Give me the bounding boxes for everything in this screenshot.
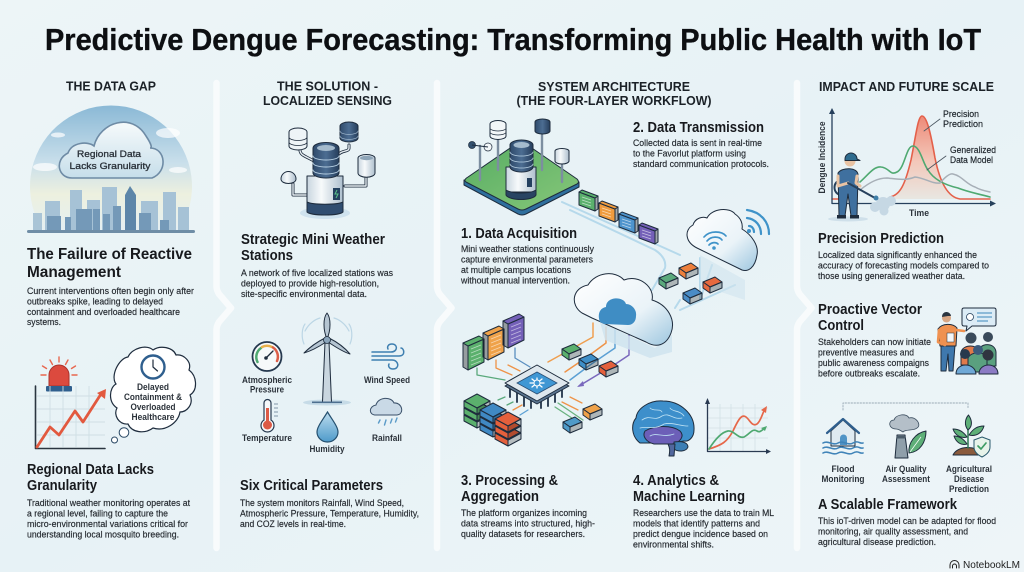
panel: the solution <box>240 78 419 529</box>
panel heading: the solution: THE SOLUTION - <box>277 78 378 94</box>
watermark: NotebookLM: NotebookLM <box>963 559 1020 571</box>
label: agricultural disease prediction <box>946 464 992 494</box>
icon: atmospheric pressure gauge <box>252 342 282 371</box>
icon: worker spraying <box>828 153 896 222</box>
text block: proactive vector control: before outbreaks escalate. <box>818 368 920 378</box>
text block: regional data lacks granularity: micro-environmental variations critical for <box>27 519 188 529</box>
text block: analytics and machine learning: Machine Learning <box>633 489 745 505</box>
text block: processing and aggregation: The platform organizes incoming <box>461 508 587 518</box>
panel heading: system architecture <box>516 79 712 108</box>
text block: failure of reactive management: systems. <box>27 317 61 327</box>
text block: processing and aggregation: quality datasets for researchers. <box>461 529 585 539</box>
text block: precision prediction <box>818 231 989 281</box>
text block: regional data lacks granularity <box>27 462 190 540</box>
text block: regional data lacks granularity: Granularity <box>27 478 97 494</box>
chart: dengue incidence over time: Data Model <box>950 155 993 165</box>
callout: delayed containment thought bubble: Overloaded <box>130 402 176 412</box>
chart: dengue incidence over time <box>817 108 996 218</box>
text block: processing and aggregation: Aggregation <box>461 489 539 505</box>
icon: presenter and audience <box>938 308 998 374</box>
panel heading: impact and future scale: IMPACT AND FUTURE SCALE <box>819 79 994 94</box>
icon: air quality factory <box>890 415 926 458</box>
label: wind speed: Wind Speed <box>364 375 410 385</box>
icon: flood monitoring <box>823 419 863 454</box>
label: flood monitoring: Flood <box>832 464 854 474</box>
label: atmospheric pressure <box>242 375 292 394</box>
illustration: city under regional cloud: Regional Data <box>77 149 142 160</box>
scale connector <box>843 403 968 410</box>
text block: data transmission: Collected data is sent in real-time <box>633 138 762 148</box>
icon: server racks <box>463 314 524 370</box>
panel heading: system architecture: (THE FOUR-LAYER WORKFLOW) <box>516 93 712 108</box>
callout: delayed containment thought bubble: Containment & <box>124 392 183 402</box>
icon: mini weather station <box>281 122 375 219</box>
text block: failure of reactive management: containment and overloaded healthcare <box>27 307 180 317</box>
icon: data packets in transit <box>579 190 658 244</box>
icon: brain <box>633 401 694 456</box>
text block: strategic mini weather stations <box>241 232 393 299</box>
icon: humidity drop <box>317 412 338 442</box>
text block: failure of reactive management: Current interventions often begin only after <box>27 286 194 296</box>
text block: proactive vector control: preventive measures and <box>818 348 914 358</box>
text block: proactive vector control: Stakeholders can now initiate <box>818 337 931 347</box>
icon: small packets <box>659 263 722 304</box>
text block: a scalable framework: agricultural disease prediction. <box>818 537 936 547</box>
text block: analytics and machine learning: models that identify patterns and <box>633 518 760 528</box>
text block: a scalable framework: A Scalable Framework <box>818 497 958 513</box>
icon: thermometer <box>261 400 278 432</box>
label: air quality assessment <box>882 464 930 484</box>
illustration: sensor platform <box>464 119 579 215</box>
text block: regional data lacks granularity: understanding local mosquito breeding. <box>27 530 179 540</box>
text block: data acquisition <box>460 226 594 286</box>
text block: precision prediction: Localized data significantly enhanced the <box>818 250 977 260</box>
callout: delayed containment thought bubble: Healthcare <box>132 412 175 422</box>
panel: the data gap <box>27 78 196 540</box>
text block: proactive vector control: public awareness compaigns <box>818 358 929 368</box>
text block: proactive vector control <box>818 302 931 378</box>
text block: six critical parameters: The system monitors Rainfall, Wind Speed, <box>240 498 404 508</box>
icon: wind <box>372 344 404 369</box>
text block: data transmission: to the Favorlut platform using <box>633 148 746 158</box>
text block: strategic mini weather stations: deployed to provide high-resolution, <box>241 278 379 288</box>
icon: rain cloud <box>370 398 402 425</box>
text block: proactive vector control: Proactive Vector <box>818 302 922 318</box>
text block: precision prediction: accuracy of forecasting models compared to <box>818 260 989 270</box>
text block: analytics and machine learning <box>633 473 774 550</box>
text block: regional data lacks granularity: Traditional weather monitoring operates at <box>27 498 190 508</box>
text block: a scalable framework: This ioT-driven model can be adapted for flood <box>818 516 996 526</box>
text block: data transmission <box>633 120 769 169</box>
panel heading: the solution <box>263 78 392 108</box>
illustration: pale data flow paths <box>562 202 735 310</box>
text block: failure of reactive management: The Failure of Reactive <box>27 246 192 263</box>
icon: alarm siren <box>41 357 77 392</box>
panel heading: system architecture: SYSTEM ARCHITECTURE <box>538 79 690 94</box>
icon: database stacks <box>464 394 521 446</box>
panel heading: the solution: LOCALIZED SENSING <box>263 93 392 108</box>
text block: data transmission: 2. Data Transmission <box>633 120 764 136</box>
text block: regional data lacks granularity: a regional level, failing to capture the <box>27 508 168 518</box>
label: temperature: Temperature <box>242 433 292 443</box>
chart: dengue incidence over time: Dengue Incidence <box>817 121 827 194</box>
panel heading: the data gap: THE DATA GAP <box>66 78 156 94</box>
label: atmospheric pressure: Atmospheric <box>242 375 292 385</box>
label: agricultural disease prediction: Disease <box>954 474 984 484</box>
icon: wind turbine <box>302 313 352 406</box>
text block: analytics and machine learning: Researchers use the data to train ML <box>633 508 774 518</box>
label: rainfall: Rainfall <box>372 433 402 443</box>
label: agricultural disease prediction: Agricultural <box>946 464 992 474</box>
text block: strategic mini weather stations: A network of five localized stations was <box>241 268 393 278</box>
text block: precision prediction: those using generalized weather data. <box>818 271 965 281</box>
text block: proactive vector control: Control <box>818 318 864 334</box>
text block: six critical parameters: Atmospheric Pressure, Temperature, Humidity, <box>240 508 419 518</box>
text block: precision prediction: Precision Prediction <box>818 231 944 247</box>
text block: failure of reactive management <box>27 246 194 327</box>
text block: data transmission: standard communication protocols. <box>633 159 769 169</box>
text block: six critical parameters: and COZ levels in real-time. <box>240 519 346 529</box>
text block: a scalable framework <box>818 497 996 547</box>
text block: data acquisition: without manual intervention. <box>460 276 570 286</box>
text block: analytics and machine learning: predict dengue incidence based on <box>633 529 768 539</box>
text block: strategic mini weather stations: Stations <box>241 248 293 264</box>
text block: strategic mini weather stations: site-specific environmental data. <box>241 289 367 299</box>
text block: failure of reactive management: outbreaks spike, leading to delayed <box>27 296 163 306</box>
label: air quality assessment: Air Quality <box>886 464 927 474</box>
text block: data acquisition: capture environmental parameters <box>461 254 593 264</box>
label: air quality assessment: Assessment <box>882 474 930 484</box>
icon: platform cloud <box>574 274 672 358</box>
icon: flow packets <box>562 344 618 433</box>
callout: delayed containment thought bubble: Delayed <box>137 382 169 392</box>
panel: impact and future scale <box>817 79 998 547</box>
illustration: city under regional cloud: Lacks Granularity <box>70 161 151 172</box>
text block: processing and aggregation: 3. Processing & <box>461 473 558 489</box>
icon: transmission cloud with wifi <box>687 209 769 300</box>
chart: analytics trend lines <box>705 398 771 454</box>
label: agricultural disease prediction: Prediction <box>949 484 989 494</box>
text block: processing and aggregation <box>461 473 595 539</box>
text block: a scalable framework: monitoring, air quality assessment, and <box>818 526 968 536</box>
text block: strategic mini weather stations: Strategic Mini Weather <box>241 232 385 248</box>
text block: regional data lacks granularity: Regional Data Lacks <box>27 462 154 478</box>
text block: failure of reactive management: Management <box>27 264 121 281</box>
title: Predictive Dengue Forecasting: Transforming Public Health with IoT <box>45 23 981 57</box>
label: atmospheric pressure: Pressure <box>250 384 284 394</box>
chart: dengue incidence over time: Time <box>909 208 929 218</box>
chart: dengue incidence over time: Generalized <box>950 145 996 155</box>
text block: data acquisition: Mini weather stations continuously <box>461 244 594 254</box>
label: flood monitoring: Monitoring <box>822 474 864 484</box>
label: flood monitoring <box>822 464 864 484</box>
text block: analytics and machine learning: 4. Analytics & <box>633 473 719 489</box>
text block: data acquisition: at multiple campus locations <box>461 265 571 275</box>
text block: analytics and machine learning: environmental shifts. <box>633 540 714 550</box>
icon: processing chip <box>505 365 569 408</box>
callout: delayed containment thought bubble <box>110 347 196 443</box>
illustration: city under regional cloud <box>27 105 195 233</box>
icon: plant with shield <box>953 415 990 457</box>
chart: rising outbreak line <box>36 386 106 448</box>
label: humidity: Humidity <box>310 444 345 454</box>
text block: data acquisition: 1. Data Acquisition <box>461 226 577 242</box>
illustration: wires to processing chip <box>477 323 629 422</box>
panel: system architecture <box>460 79 774 550</box>
text block: processing and aggregation: data streams into structured, high- <box>461 518 595 528</box>
chart: dengue incidence over time: Prediction <box>943 119 983 129</box>
chart: dengue incidence over time: Precision <box>943 109 979 119</box>
text block: six critical parameters: Six Critical Parameters <box>240 478 383 494</box>
text block: six critical parameters <box>240 478 419 529</box>
